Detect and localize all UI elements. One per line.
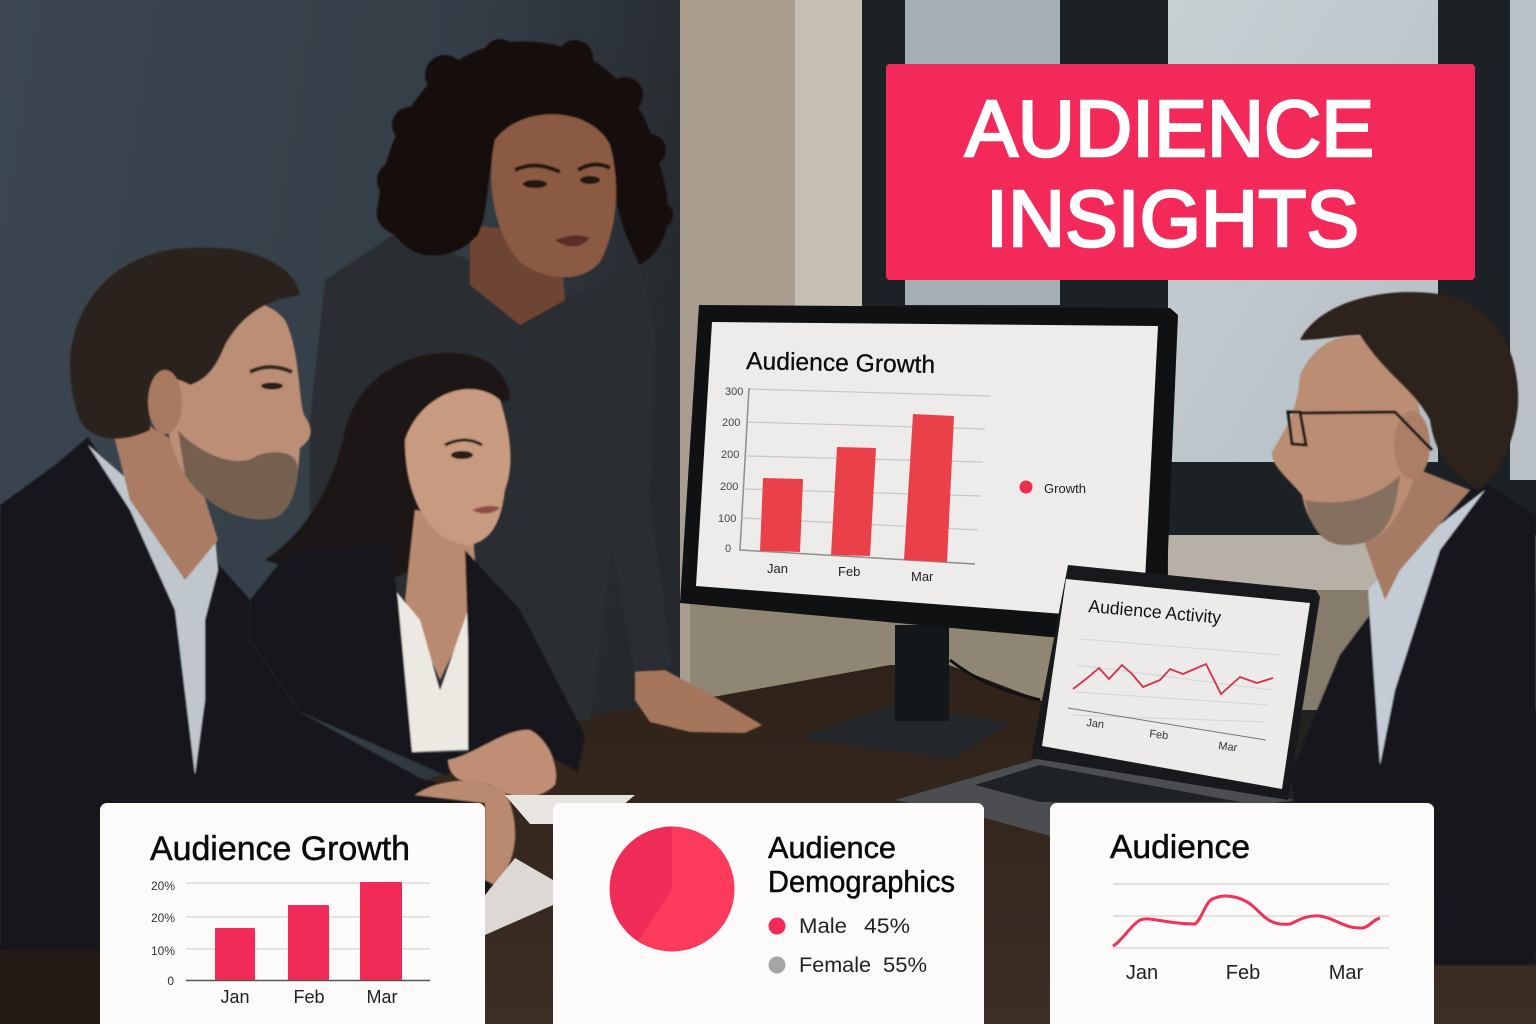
title banner <box>886 64 1475 280</box>
monitor axis labels <box>718 386 934 584</box>
laptop activity line <box>1073 664 1273 694</box>
monitor axis labels: 100 <box>718 513 736 525</box>
legend: female <box>768 954 927 977</box>
monitor axis labels: 0 <box>725 543 731 555</box>
table <box>0 665 1536 1024</box>
laptop screen <box>1042 579 1310 789</box>
monitor chart title: Audience Growth <box>746 348 935 379</box>
title text: AUDIENCE <box>965 84 1374 173</box>
monitor axis labels: 200 <box>721 449 739 461</box>
monitor bars <box>760 414 954 562</box>
person: right man <box>1272 292 1536 965</box>
laptop chart: audience activity <box>1068 596 1280 754</box>
x axis labels: Mar <box>366 987 398 1007</box>
y axis labels: 10% <box>151 944 175 958</box>
title text <box>965 84 1374 263</box>
laptop axis labels: Feb <box>1149 728 1169 742</box>
x axis labels <box>1126 962 1364 984</box>
card heading: audience: Audience <box>1110 828 1250 865</box>
monitor legend: Growth <box>1044 481 1086 496</box>
card heading: audience demographics <box>768 830 955 899</box>
line chart <box>1113 896 1380 946</box>
laptop <box>895 565 1320 836</box>
monitor stand <box>802 625 1040 758</box>
glasses <box>1288 412 1432 450</box>
monitor chart: audience growth <box>718 348 1086 584</box>
card heading: audience growth: Audience Growth <box>150 830 410 868</box>
panel: audience demographics card <box>553 803 984 1024</box>
monitor legend <box>1020 480 1086 496</box>
legend: male <box>768 915 910 938</box>
title text: INSIGHTS <box>986 174 1359 263</box>
monitor axis labels: 200 <box>720 481 738 493</box>
y axis labels: 20% <box>151 911 175 925</box>
legend: female: 55% <box>883 954 927 977</box>
bar chart: growth by month <box>215 882 402 980</box>
monitor axis labels: Jan <box>767 561 788 576</box>
papers on table <box>485 795 635 935</box>
x axis labels: Jan <box>1126 962 1158 984</box>
laptop chart title: Audience Activity <box>1088 596 1222 628</box>
laptop axis labels <box>1086 717 1238 754</box>
person: seated woman <box>250 353 585 797</box>
legend: male: Male <box>799 915 847 938</box>
x axis labels: Jan <box>220 987 250 1007</box>
laptop base and keyboard <box>895 758 1295 836</box>
legend: male: 45% <box>864 915 910 938</box>
monitor axis labels: Mar <box>911 569 934 584</box>
laptop axis labels: Jan <box>1086 717 1105 731</box>
x axis labels: Feb <box>1226 962 1260 984</box>
x axis labels: Mar <box>1329 962 1364 984</box>
monitor axis labels: 300 <box>725 386 743 398</box>
y axis labels: 20% <box>151 879 175 893</box>
person: left man <box>0 248 515 950</box>
panel: audience growth card <box>100 803 485 1024</box>
monitor axis labels: 200 <box>722 417 740 429</box>
laptop axis labels: Mar <box>1218 740 1238 754</box>
monitor axis labels: Feb <box>838 564 860 579</box>
curly hair <box>377 39 673 265</box>
y axis labels <box>151 879 175 988</box>
legend: female: Female <box>799 954 871 977</box>
pie chart <box>610 826 734 952</box>
x axis labels: Feb <box>293 987 325 1007</box>
panel: audience line chart card <box>1050 803 1434 1024</box>
y axis labels: 0 <box>167 974 174 988</box>
monitor frame <box>680 305 1178 645</box>
monitor screen <box>696 322 1158 620</box>
laptop frame <box>1031 565 1320 800</box>
x axis labels <box>220 987 398 1007</box>
monitor <box>680 305 1178 758</box>
person: standing woman <box>310 39 762 733</box>
card heading: audience demographics: Audience <box>768 830 896 865</box>
card heading: audience demographics: Demographics <box>768 864 955 899</box>
